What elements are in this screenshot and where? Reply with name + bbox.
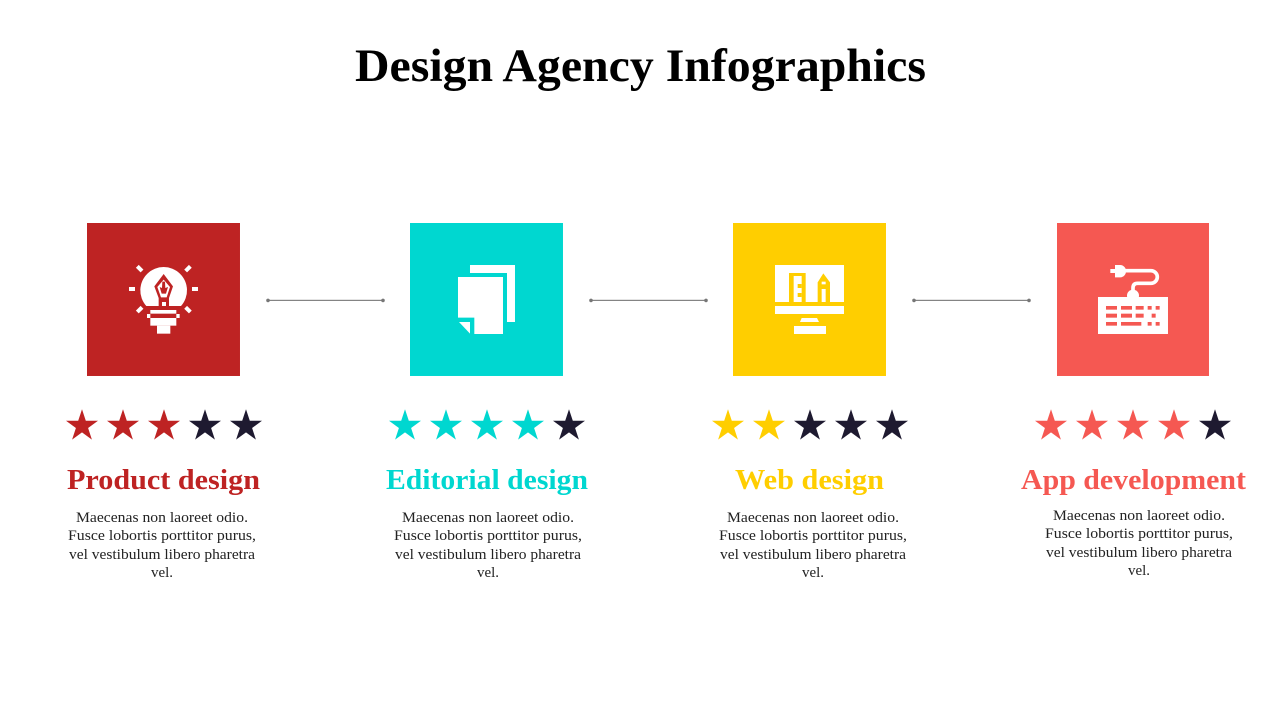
text block: product design: vel.: [151, 565, 173, 581]
arrow: connector 1: [266, 299, 385, 302]
panel: app development: [1021, 223, 1246, 579]
text block: web design: Fusce lobortis porttitor purus,: [719, 528, 907, 544]
text block: app development: vel vestibulum libero pharetra: [1046, 545, 1232, 561]
panel: editorial design: [386, 223, 588, 581]
title: Design Agency Infographics: [355, 40, 926, 92]
text block: app development: Maecenas non laoreet odio.: [1053, 508, 1225, 524]
text block: product design: [68, 510, 256, 581]
star rating: 4 of 5: [389, 409, 585, 440]
text block: editorial design: Fusce lobortis porttitor purus,: [394, 528, 582, 544]
text block: product design: Maecenas non laoreet odio.: [76, 510, 248, 526]
star rating: 3 of 5: [66, 409, 262, 440]
text block: web design: Maecenas non laoreet odio.: [727, 510, 899, 526]
arrow: connector 3: [912, 299, 1031, 302]
heading: app development: App development: [1021, 464, 1246, 496]
icon: documents: [410, 223, 563, 376]
text block: web design: [719, 510, 907, 581]
text block: product design: Fusce lobortis porttitor purus,: [68, 528, 256, 544]
text block: product design: vel vestibulum libero pharetra: [69, 547, 255, 563]
text block: web design: vel.: [802, 565, 824, 581]
heading: product design: Product design: [67, 464, 260, 496]
text block: app development: Fusce lobortis porttitor purus,: [1045, 526, 1233, 542]
text block: editorial design: vel.: [477, 565, 499, 581]
icon: monitor with ruler and pencil: [733, 223, 886, 376]
icon: light bulb with pen nib: [87, 223, 240, 376]
text block: app development: [1045, 508, 1233, 579]
text block: app development: vel.: [1128, 563, 1150, 579]
text block: editorial design: [394, 510, 582, 581]
text block: web design: vel vestibulum libero pharetra: [720, 547, 906, 563]
star rating: 2 of 5: [712, 409, 908, 440]
heading: editorial design: Editorial design: [386, 464, 588, 496]
panel: product design: [66, 223, 262, 581]
panel: web design: [712, 223, 908, 581]
icon: keyboard with plug: [1057, 223, 1209, 376]
heading: web design: Web design: [735, 464, 884, 496]
star rating: 4 of 5: [1035, 409, 1231, 440]
text block: editorial design: Maecenas non laoreet odio.: [402, 510, 574, 526]
text block: editorial design: vel vestibulum libero pharetra: [395, 547, 581, 563]
arrow: connector 2: [589, 299, 708, 302]
